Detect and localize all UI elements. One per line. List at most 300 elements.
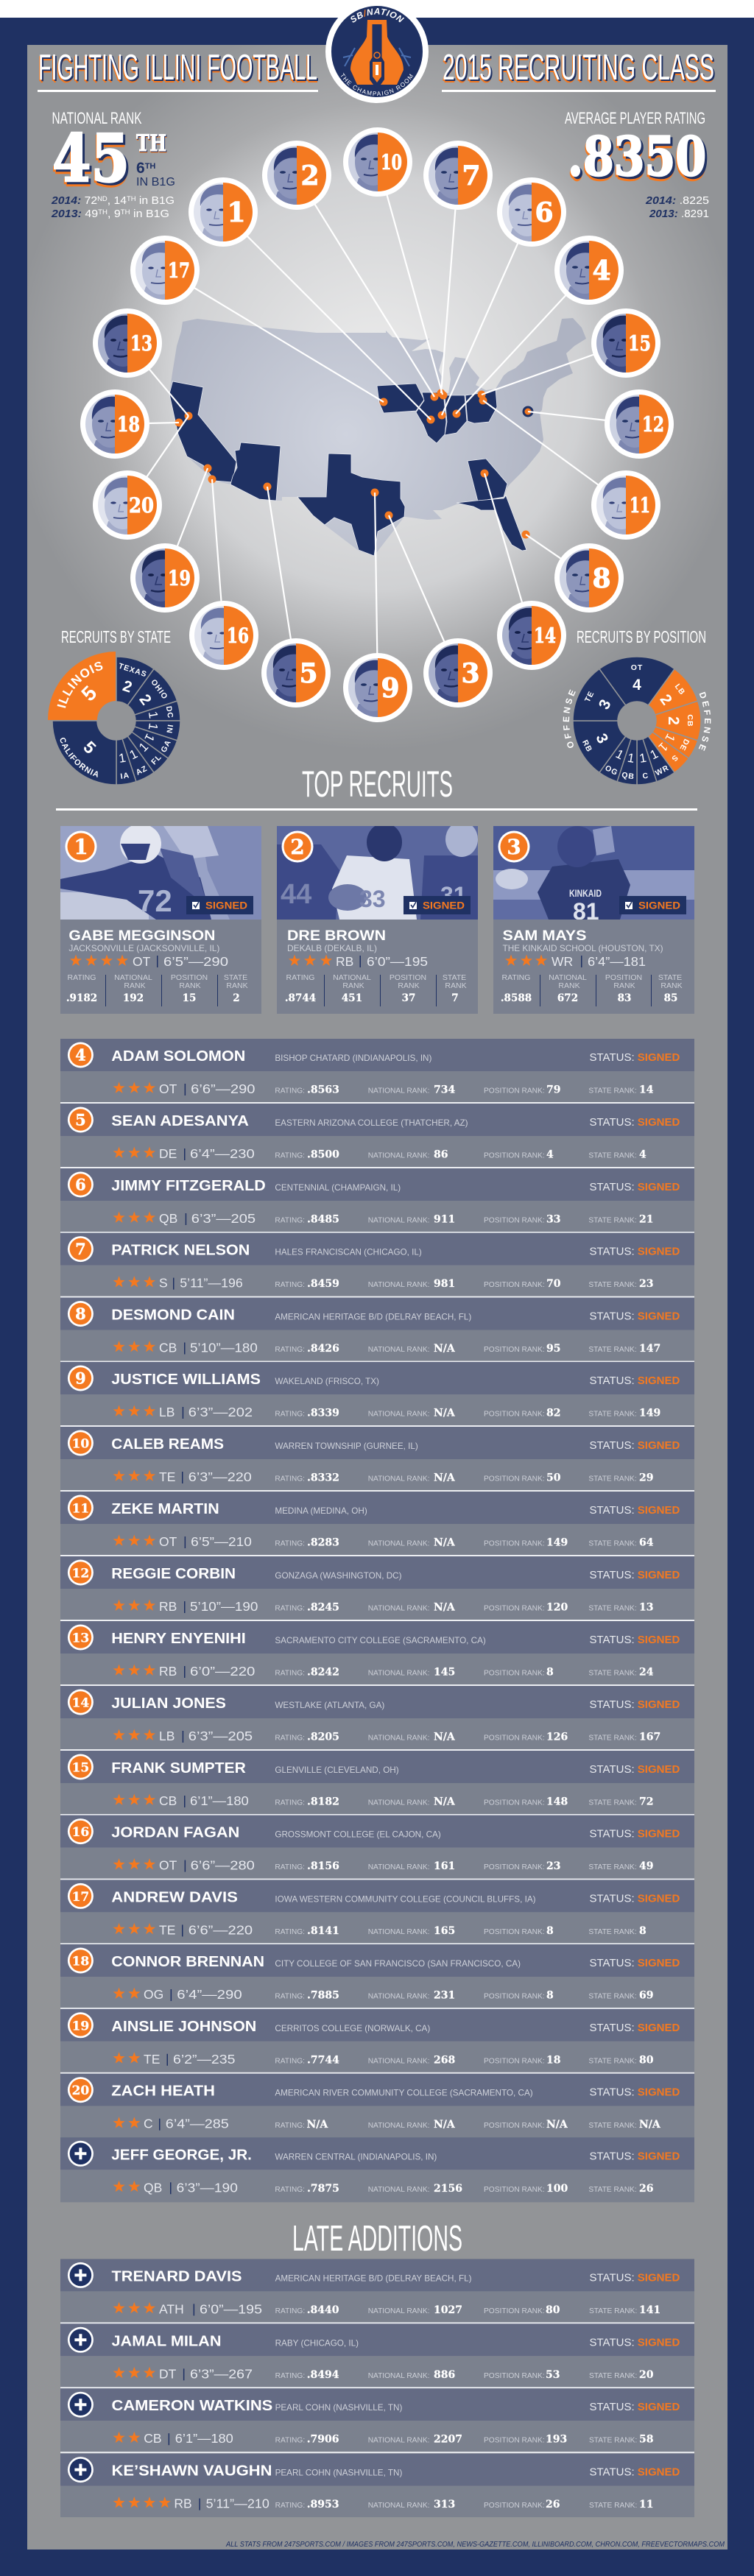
- stats: RATING:: [275, 1216, 305, 1225]
- bubble: recruit 15: 15: [628, 331, 651, 356]
- status: STATUS: SIGNED: [589, 1504, 680, 1517]
- rank badge: 17: [72, 1890, 89, 1905]
- stats: N/A: [434, 1472, 456, 1484]
- bubble: recruit 9: 9: [381, 673, 400, 704]
- stats: 8: [639, 1925, 646, 1937]
- average player rating block: 2014: .8225: [645, 194, 709, 207]
- position and size: 6’3”—205: [191, 1211, 256, 1226]
- pie chart: recruits by state: ILLINOIS: [57, 661, 103, 708]
- bubble: recruit 4: [554, 236, 624, 305]
- position and size: [159, 1534, 252, 1549]
- position and size: [144, 2431, 233, 2446]
- name: FRANK SUMPTER: [111, 1760, 246, 1776]
- position and size: [144, 2052, 235, 2067]
- stats: 23: [546, 1860, 560, 1872]
- national rank block: TH: [127, 195, 136, 202]
- rank badge: 13: [72, 1631, 89, 1646]
- stats: STATE RANK:: [588, 1799, 637, 1807]
- stats: 70: [546, 1278, 561, 1290]
- stats: 85: [664, 992, 677, 1004]
- stats: .8440: [307, 2304, 339, 2316]
- name and school: SAM MAYS: [502, 928, 586, 944]
- pie chart: recruits by state: CALIFORNIA: [60, 738, 98, 777]
- pie chart: recruits by state: 1: [127, 747, 140, 763]
- stats: 53: [546, 2369, 560, 2381]
- card: Sam Mays: THE KINKAID SCHOOL (HOUSTON, TX): [502, 943, 663, 953]
- logo: The Champaign Room: [325, 6, 429, 103]
- average player rating block: .8350: [568, 125, 706, 188]
- late row: Cameron Watkins: [60, 2388, 694, 2453]
- stats: [66, 973, 248, 1006]
- pie chart: recruits by position: OG: [604, 763, 619, 777]
- rank badge: [68, 1948, 94, 1973]
- stats: NATIONAL: [333, 973, 371, 982]
- stats: NATIONAL RANK:: [368, 1281, 429, 1289]
- stats: POSITION RANK:: [484, 2372, 545, 2380]
- stats: .8332: [307, 1472, 339, 1484]
- pie chart: recruits by state: 1: [146, 710, 161, 719]
- stats: POSITION RANK:: [484, 1799, 545, 1807]
- stats: RATING:: [275, 1735, 305, 1742]
- stats: 192: [123, 992, 144, 1004]
- bubble: recruit 5: 5: [299, 658, 318, 689]
- stats: POSITION RANK:: [484, 1540, 545, 1548]
- position and size: 5’11”—210: [206, 2496, 269, 2511]
- position and size: [159, 1793, 249, 1808]
- pie chart: recruits by state: GA: [159, 738, 173, 754]
- national rank block: in B1G: [136, 194, 175, 207]
- school: AMERICAN RIVER COMMUNITY COLLEGE (SACRAMENTO, CA): [275, 2089, 533, 2098]
- stats: POSITION: [390, 973, 426, 982]
- stats: RATING:: [275, 1863, 305, 1871]
- bubble: recruit 16: [189, 601, 258, 670]
- pie chart: recruits by position: S: [669, 753, 680, 763]
- bubble: recruit 20: 20: [129, 493, 154, 518]
- stars: [113, 2181, 140, 2192]
- recruit row: Henry Enyenihi: [60, 1621, 694, 1686]
- pie chart: recruits by state: OHIO: [149, 678, 169, 702]
- stars: [113, 1923, 155, 1934]
- card: Gabe Megginson: JACKSONVILLE (JACKSONVILLE, IL): [68, 943, 219, 953]
- pie chart: recruits by position: 3: [592, 731, 611, 747]
- stats: NATIONAL RANK:: [368, 2502, 429, 2510]
- bubble: recruit 17: [130, 236, 200, 305]
- stars: [113, 1988, 140, 1999]
- heading: late additions: LATE ADDITIONS: [292, 2219, 462, 2259]
- bubble: recruit 19: [130, 543, 200, 613]
- position and size: QB: [144, 2180, 162, 2195]
- school: EASTERN ARIZONA COLLEGE (THATCHER, AZ): [275, 1118, 468, 1128]
- name: DESMOND CAIN: [111, 1308, 235, 1324]
- position and size: 5’11”—196: [180, 1276, 243, 1291]
- stats: RATING:: [275, 1346, 305, 1354]
- school: RABY (CHICAGO, IL): [275, 2338, 359, 2348]
- stats: RATING: [68, 973, 96, 982]
- stats: STATE RANK:: [588, 2122, 637, 2130]
- stats: 86: [434, 1148, 448, 1160]
- stats: 24: [639, 1667, 654, 1679]
- stats: NATIONAL RANK:: [368, 2122, 429, 2130]
- bubble: recruit 1: 1: [227, 197, 246, 228]
- stars: [113, 2302, 155, 2313]
- bubble: recruit 12: [605, 389, 674, 459]
- status: STATUS: SIGNED: [589, 1181, 680, 1193]
- stats: 167: [639, 1732, 660, 1743]
- pie chart: recruits by position: 4: [633, 677, 641, 694]
- stats: NATIONAL RANK:: [368, 1346, 429, 1354]
- position and size: [159, 1146, 255, 1161]
- plus badge: [68, 2327, 94, 2353]
- stats: STATE RANK:: [588, 1475, 637, 1483]
- stats: 50: [546, 1472, 561, 1484]
- state: Ohio: [465, 389, 497, 423]
- position and size: 6’6”—290: [191, 1081, 256, 1096]
- name: KE’SHAWN VAUGHN: [112, 2463, 272, 2480]
- stats: POSITION RANK:: [484, 1346, 545, 1354]
- stats: NATIONAL RANK:: [368, 1992, 429, 2001]
- stats: .8494: [307, 2369, 339, 2381]
- name and school: DRE BROWN: [287, 928, 386, 944]
- stats: 80: [639, 2054, 654, 2066]
- rank badge 2: [281, 830, 314, 863]
- stars and size: 6’5”—290: [163, 954, 228, 969]
- stats: POSITION RANK:: [484, 2437, 545, 2445]
- stats: STATE RANK:: [588, 1411, 637, 1418]
- school: WAKELAND (FRISCO, TX): [275, 1377, 379, 1386]
- position and size: 5’10”—190: [190, 1599, 258, 1614]
- stats: .8588: [501, 992, 532, 1004]
- rank badge: 6: [75, 1175, 86, 1194]
- stats: STATE RANK:: [588, 1670, 637, 1677]
- stats: POSITION RANK:: [484, 1735, 545, 1742]
- recruit row: Julian Jones: [60, 1686, 694, 1751]
- school: AMERICAN HERITAGE B/D (DELRAY BEACH, FL): [275, 1312, 471, 1322]
- national rank block: TH: [136, 130, 166, 157]
- rank badge: [68, 1883, 94, 1909]
- stars and size: [289, 954, 428, 969]
- connector lines: [115, 162, 639, 688]
- position and size: LB: [159, 1405, 175, 1419]
- school: SACRAMENTO CITY COLLEGE (SACRAMENTO, CA): [275, 1636, 486, 1645]
- signed tag: SIGNED: [205, 900, 247, 911]
- bubble: recruit 8: 8: [592, 563, 611, 594]
- stats: RANK: [398, 981, 420, 990]
- pie chart: recruits by state: IA: [120, 771, 130, 781]
- stats: STATE RANK:: [588, 1992, 637, 2001]
- recruit row: Reggie Corbin: [60, 1556, 694, 1621]
- school: MEDINA (MEDINA, OH): [275, 1506, 367, 1516]
- state: Illinois: [416, 392, 446, 443]
- card: Dre Brown: DEKALB (DEKALB, IL): [287, 943, 377, 953]
- stats: RATING:: [275, 1670, 305, 1677]
- bubble: recruit 19: 19: [168, 566, 191, 590]
- pie chart: recruits by position: 3: [596, 697, 615, 712]
- signed tag: [186, 896, 253, 914]
- stats: 13: [639, 1602, 653, 1614]
- status: STATUS: SIGNED: [589, 2086, 680, 2099]
- bubble: recruit 3: [423, 638, 493, 707]
- pie chart: recruits by state: 5: [80, 737, 100, 758]
- rank badge: [68, 1495, 94, 1521]
- position and size: [159, 1599, 258, 1614]
- recruit row: Zeke Martin: [60, 1492, 694, 1556]
- status: STATUS: SIGNED: [589, 1892, 680, 1905]
- stats: 4: [639, 1148, 646, 1160]
- stats: .8485: [307, 1213, 339, 1225]
- stats: POSITION RANK:: [484, 1605, 545, 1612]
- stats: 8: [546, 1925, 554, 1937]
- stats: STATE RANK:: [588, 2057, 637, 2065]
- stats: POSITION RANK:: [484, 2122, 545, 2130]
- stats: 886: [434, 2369, 455, 2381]
- stats: 29: [639, 1472, 653, 1484]
- rank badge: 4: [75, 1045, 86, 1065]
- photo: player 1: [60, 824, 261, 920]
- rank badge: 10: [72, 1437, 89, 1452]
- school: IOWA WESTERN COMMUNITY COLLEGE (COUNCIL BLUFFS, IA): [275, 1894, 536, 1904]
- name: JORDAN FAGAN: [111, 1825, 239, 1841]
- stats: RATING:: [275, 1087, 305, 1095]
- pie chart: recruits by position: 1: [613, 747, 626, 763]
- rank badge: [68, 1301, 94, 1327]
- national rank block: , 9: [108, 208, 121, 220]
- name: ANDREW DAVIS: [111, 1889, 238, 1905]
- stats: 64: [639, 1537, 654, 1549]
- pie chart: recruits by state: FL: [149, 752, 163, 766]
- rank badge 3: 3: [507, 835, 521, 859]
- stats: .7885: [307, 1989, 339, 2001]
- status: STATUS: SIGNED: [589, 2336, 680, 2349]
- stats: 8: [546, 1989, 554, 2001]
- name: JIMMY FITZGERALD: [111, 1178, 266, 1194]
- bubble: recruit 17: 17: [168, 258, 190, 283]
- stars and size: [70, 954, 228, 969]
- national rank block: TH: [145, 162, 155, 171]
- stats: POSITION RANK:: [484, 1151, 545, 1160]
- position and size: [159, 1729, 253, 1743]
- stats: NATIONAL RANK:: [368, 2372, 429, 2380]
- stats: N/A: [434, 1343, 456, 1355]
- stats: N/A: [306, 2119, 328, 2131]
- national rank block: TH: [98, 208, 108, 216]
- card: Gabe Megginson: [60, 824, 261, 1014]
- status: STATUS: SIGNED: [589, 2022, 680, 2034]
- stats: 1027: [434, 2304, 462, 2316]
- bubble: recruit 16: 16: [227, 624, 249, 648]
- stars: [113, 1469, 155, 1481]
- pie chart: recruits by position: WR: [654, 763, 671, 777]
- bubble: recruit 10: [343, 127, 412, 197]
- stats: [285, 973, 467, 1006]
- stars: [113, 1729, 155, 1740]
- school: PEARL COHN (NASHVILLE, TN): [275, 2403, 402, 2413]
- state: Florida: [457, 495, 526, 551]
- position and size: LB: [159, 1729, 175, 1743]
- position and size: 6’2”—235: [173, 2052, 235, 2067]
- bubble: recruit 7: 7: [462, 160, 481, 191]
- position and size: CB: [159, 1793, 177, 1808]
- stars: [113, 1082, 155, 1093]
- stats: 26: [639, 2183, 653, 2195]
- stats: STATE RANK:: [588, 1216, 637, 1225]
- stats: 82: [546, 1408, 560, 1419]
- status: STATUS: SIGNED: [589, 2466, 680, 2479]
- rank badge: 19: [72, 2019, 89, 2033]
- stats: .8182: [307, 1796, 339, 1808]
- status: STATUS: SIGNED: [589, 2271, 680, 2284]
- rank badge: 14: [72, 1696, 89, 1711]
- position and size: 6’4”—290: [177, 1987, 242, 2002]
- position and size: 6’3”—190: [177, 2180, 238, 2195]
- pie chart: recruits by position: DEFENSE: [698, 692, 711, 751]
- stats: RANK: [124, 981, 146, 990]
- stars: [113, 1534, 155, 1546]
- stars: [113, 1793, 155, 1805]
- school: WARREN TOWNSHIP (GURNEE, IL): [275, 1441, 418, 1451]
- state: Indiana: [445, 395, 467, 435]
- stars: [113, 2367, 155, 2378]
- status: STATUS: SIGNED: [589, 1310, 680, 1322]
- stats: POSITION RANK:: [484, 1281, 545, 1289]
- position and size: [144, 2117, 229, 2131]
- stats: 149: [546, 1537, 568, 1549]
- national rank block: TH: [121, 208, 130, 216]
- position and size: C: [144, 2117, 153, 2131]
- stats: N/A: [434, 2119, 456, 2131]
- stats: [501, 973, 683, 1006]
- pie chart: recruits by position: C: [642, 771, 649, 781]
- stats: .8245: [307, 1602, 339, 1614]
- stats: 7: [451, 992, 459, 1004]
- status: STATUS: SIGNED: [589, 1375, 680, 1387]
- position and size: ATH: [159, 2301, 184, 2316]
- photo: player 3: 81: [573, 898, 599, 925]
- status: STATUS: SIGNED: [589, 1569, 680, 1581]
- pie chart: recruits by state: AZ: [135, 764, 149, 777]
- rank badge: 8: [75, 1305, 86, 1323]
- bubble: recruit 2: [262, 141, 331, 210]
- stats: 451: [342, 992, 362, 1004]
- stats: POSITION RANK:: [484, 2057, 545, 2065]
- stats: 4: [546, 1148, 554, 1160]
- stats: 69: [639, 1989, 653, 2001]
- stats: NATIONAL RANK:: [368, 2307, 429, 2315]
- national rank block: 45: [52, 119, 130, 197]
- stars: [113, 1599, 155, 1611]
- stats: NATIONAL RANK:: [368, 1216, 429, 1225]
- stats: 80: [546, 2304, 560, 2316]
- position and size: [159, 1340, 258, 1355]
- school: WESTLAKE (ATLANTA, GA): [275, 1701, 384, 1710]
- school: CERRITOS COLLEGE (NORWALK, CA): [275, 2024, 430, 2033]
- stats: RATING: [502, 973, 530, 982]
- bubble: recruit 14: [497, 601, 566, 670]
- stats: STATE RANK:: [589, 2372, 637, 2380]
- school: GLENVILLE (CLEVELAND, OH): [275, 1765, 399, 1775]
- stats: .8459: [307, 1278, 339, 1290]
- stats: 141: [639, 2304, 660, 2316]
- position and size: OT: [159, 1081, 177, 1096]
- school: BISHOP CHATARD (INDIANAPOLIS, IN): [275, 1054, 432, 1063]
- position and size: S: [159, 1276, 168, 1291]
- stats: 8: [546, 1667, 554, 1679]
- recruit row: Ainslie Johnson: [60, 2009, 694, 2074]
- late row: Ke'Shawn Vaughn: [60, 2454, 694, 2517]
- title underline right: [442, 90, 716, 92]
- stats: 161: [434, 1860, 455, 1872]
- stats: RATING: [286, 973, 314, 982]
- position and size: [159, 1081, 256, 1096]
- position and size: OG: [144, 1987, 163, 2002]
- recruit row: Adam Solomon: [60, 1039, 694, 1104]
- stats: NATIONAL RANK:: [368, 1670, 429, 1677]
- stats: RATING:: [275, 2057, 305, 2065]
- stats: NATIONAL: [114, 973, 152, 982]
- stats: POSITION RANK:: [484, 1087, 545, 1095]
- bubble: recruit 4: 4: [592, 255, 611, 286]
- status: STATUS: SIGNED: [589, 2401, 680, 2413]
- late row: Trenard Davis: [60, 2259, 694, 2323]
- stats: NATIONAL RANK:: [368, 1735, 429, 1742]
- rank badge: 12: [72, 1567, 89, 1581]
- rank badge: [68, 1042, 94, 1068]
- stars: [113, 1405, 155, 1416]
- position and size: [159, 2366, 253, 2381]
- heading: top recruits: TOP RECRUITS: [302, 763, 453, 805]
- stats: RATING:: [275, 2307, 305, 2315]
- pie chart: recruits by position: 1: [656, 740, 671, 755]
- stats: STATE RANK:: [588, 2186, 637, 2194]
- position and size: RB: [159, 1599, 177, 1614]
- position and size: TE: [159, 1469, 175, 1484]
- pie chart: recruits by state: 2: [135, 691, 155, 708]
- card: Sam Mays: [493, 826, 694, 1014]
- school: GONZAGA (WASHINGTON, DC): [275, 1571, 402, 1581]
- bubble: recruit 13: [93, 308, 162, 378]
- stats: 147: [639, 1343, 660, 1355]
- pie chart: recruits by position: LB: [673, 682, 687, 697]
- stats: 83: [618, 992, 631, 1004]
- stats: RATING:: [275, 1605, 305, 1612]
- national rank block: IN B1G: [136, 176, 175, 188]
- stats: POSITION RANK:: [484, 1411, 545, 1418]
- bubble: recruit 11: 11: [630, 493, 650, 518]
- bubble: recruit 13: 13: [130, 331, 152, 356]
- position and size: 6’5”—210: [191, 1534, 252, 1549]
- stats: N/A: [639, 2119, 661, 2131]
- stats: .8500: [307, 1148, 339, 1160]
- recruit row: Connor Brennan: [60, 1944, 694, 2009]
- bubble: recruit 9: [343, 653, 412, 722]
- name: REGGIE CORBIN: [111, 1566, 236, 1582]
- pie chart: recruits by position: RB: [580, 738, 594, 754]
- school: WARREN CENTRAL (INDIANAPOLIS, IN): [275, 2152, 437, 2162]
- stats: .8563: [307, 1084, 339, 1095]
- stats: STATE: [658, 973, 682, 982]
- photo: player 2: 31: [440, 882, 467, 908]
- rank badge 1: 1: [74, 835, 88, 859]
- recruit row: Patrick Nelson: [60, 1233, 694, 1298]
- stats: 49: [639, 1860, 653, 1872]
- position and size: 6’4”—285: [166, 2117, 229, 2131]
- position and size: RB: [174, 2496, 192, 2511]
- name: AINSLIE JOHNSON: [111, 2019, 256, 2035]
- stats: RATING:: [275, 1799, 305, 1807]
- name: CALEB REAMS: [111, 1436, 224, 1453]
- stats: RATING:: [275, 1928, 305, 1936]
- stats: .7744: [307, 2054, 339, 2066]
- stats: RANK: [342, 981, 364, 990]
